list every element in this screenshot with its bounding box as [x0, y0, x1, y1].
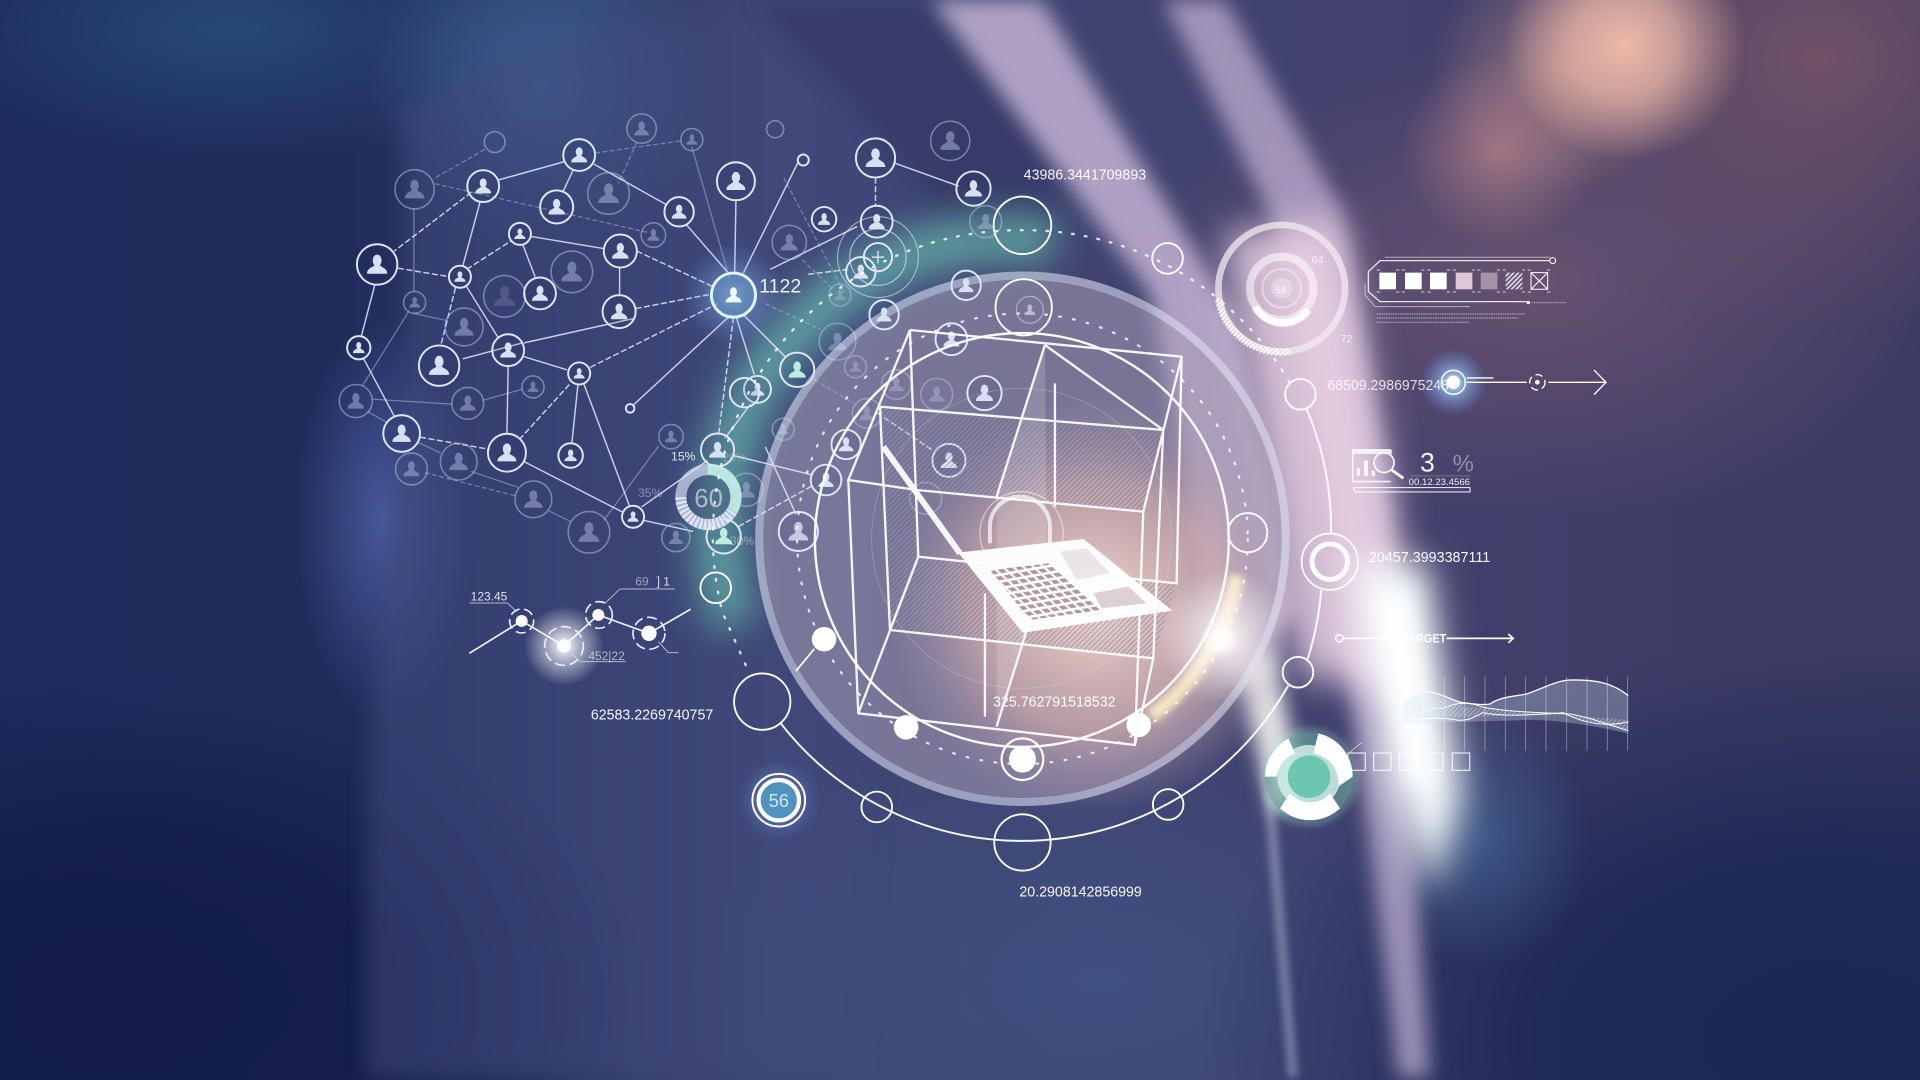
plus target rings [838, 217, 918, 298]
network edges: bright dashed [394, 178, 933, 527]
teal segmented donut [1259, 727, 1359, 827]
laptop screen edge [883, 447, 960, 553]
gauge: 60 with percentages: 60 [694, 485, 723, 513]
inner dotted ring [797, 313, 1248, 764]
badge: 56 [737, 759, 820, 842]
row of empty squares [1348, 743, 1470, 770]
translucent diamond plane [997, 345, 1047, 727]
badge: 56: 56 [769, 790, 789, 811]
inner thin ring [815, 333, 1229, 747]
search chart icon with percent: % [1453, 451, 1474, 478]
inner ring nodes [796, 513, 1267, 780]
value label: top: 43986.3441709893 [1024, 167, 1146, 183]
suit sleeve edge [367, 2, 931, 1078]
network edges: dim [362, 141, 853, 522]
search chart icon with percent: 3 [1420, 448, 1435, 478]
line chart with labelled points: 69 [635, 575, 649, 589]
value label: left: 62583.2269740757 [591, 707, 713, 723]
radial gauge: 58: 72 [1341, 334, 1353, 346]
background: blurred suit and shirt photo [367, 0, 1463, 1078]
network nodes: bright [347, 138, 1002, 553]
thick middle ring [759, 276, 1286, 802]
status panel with squares [1365, 257, 1566, 322]
network nodes: dim [339, 114, 1002, 553]
gauge: 60 with percentages: 30% [730, 534, 754, 548]
value label: centre: 325.762791518532 [993, 695, 1116, 711]
line chart with labelled points: 123.45 [471, 589, 508, 603]
network edges: bright solid [361, 162, 959, 531]
line chart with labelled points: ] 1 [657, 575, 670, 589]
wireframe cube with laptop [848, 330, 1182, 745]
faint inner rings [872, 388, 1172, 688]
hatched cube walls [880, 407, 1177, 658]
area line chart [1403, 677, 1628, 751]
target arrow: TARGET [1402, 632, 1447, 646]
hub count label: 1122 [759, 276, 801, 298]
outer orbit ring with nodes [700, 197, 1358, 871]
value label: 20457: 20457.3993387111 [1369, 550, 1490, 566]
radial gauge: 58: 58 [1275, 286, 1287, 297]
target arrow [1336, 632, 1513, 646]
laptop base [960, 540, 1170, 632]
line chart with labelled points: 452|22 [588, 649, 625, 663]
cube edges [848, 330, 1182, 745]
radial gauge: 58 [1218, 225, 1353, 352]
gauge: 60 with percentages [638, 449, 754, 548]
search chart icon with percent [1353, 448, 1474, 492]
arrow indicator with value [1327, 349, 1606, 416]
central hub node [682, 244, 785, 347]
central glow and teal arc [719, 238, 1304, 814]
gauge: 60 with percentages: 35% [638, 486, 663, 500]
value label: 68509: 68509.2986975248 [1327, 378, 1449, 394]
padlock [980, 492, 1063, 575]
shirt stripes [931, 0, 1298, 686]
top inner node [996, 279, 1052, 336]
line chart with labelled points [469, 575, 691, 686]
radial gauge: 58: 64 [1312, 254, 1324, 266]
value label: bottom: 20.2908142856999 [1019, 884, 1142, 900]
lapel shadow [753, 2, 1078, 257]
people network [339, 114, 1002, 553]
search chart icon with percent: 00.12.23.4566 [1409, 477, 1470, 487]
gauge: 60 with percentages: 20% [722, 451, 747, 465]
gauge: 60 with percentages: 15% [671, 449, 696, 463]
